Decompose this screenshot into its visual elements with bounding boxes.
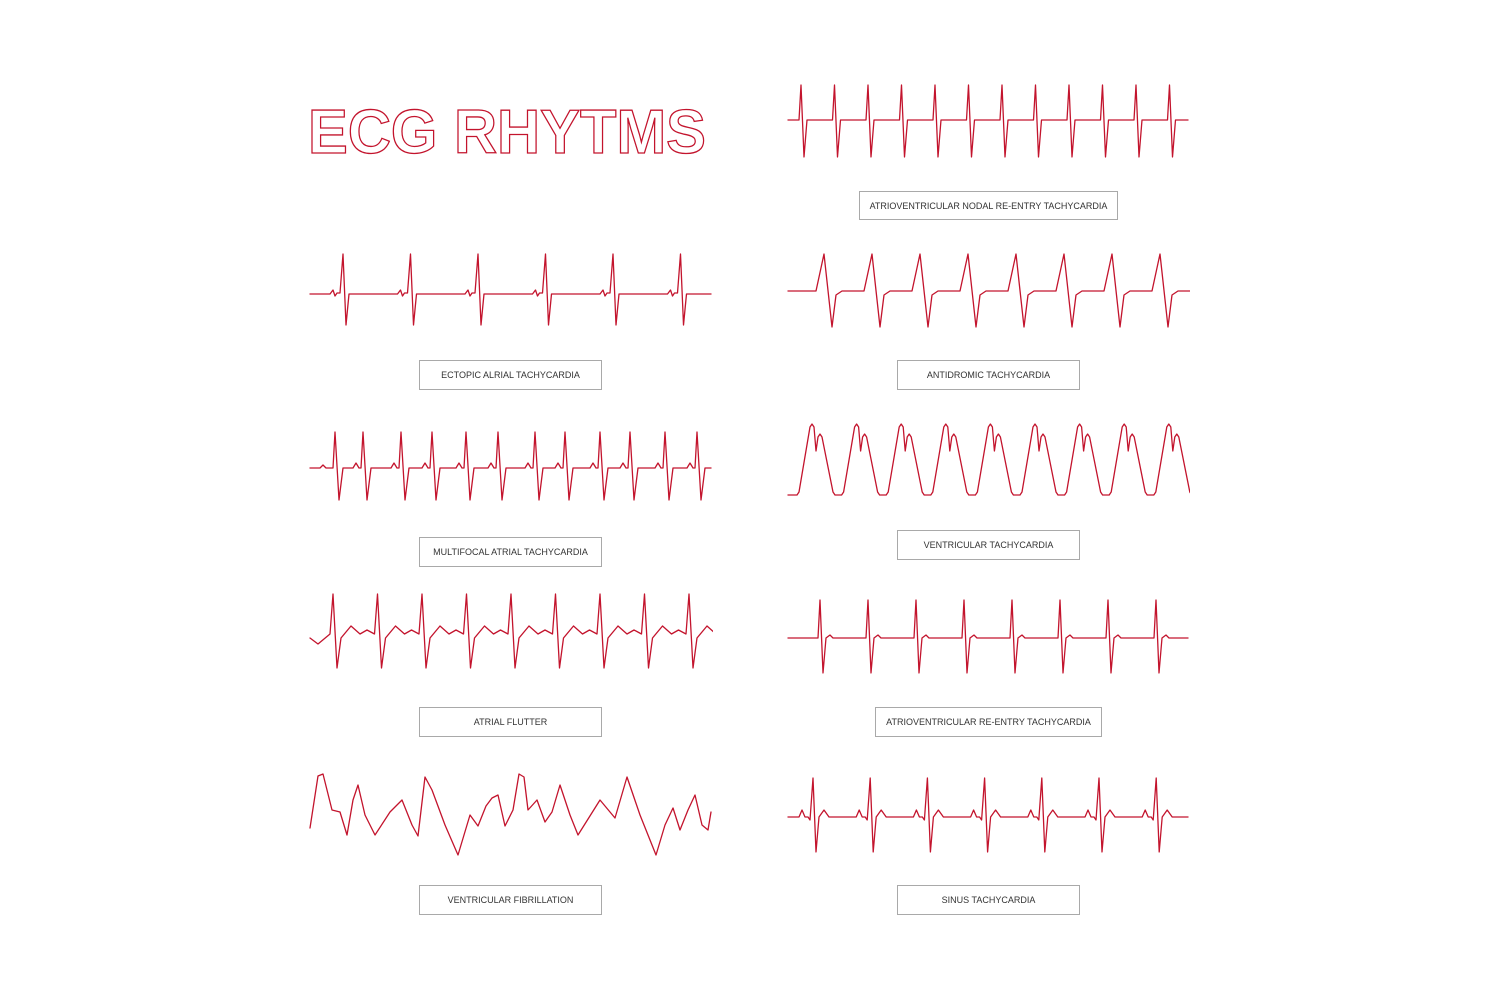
label: sinus tachycardia: SINUS TACHYCARDIA bbox=[942, 895, 1035, 905]
ecg: antidromic tachycardia bbox=[787, 253, 1190, 328]
label: atrioventricular nodal re-entry tachycardia: ATRIOVENTRICULAR NODAL RE-ENTRY TACHYCARDIA bbox=[870, 200, 1107, 210]
ecg: atrioventricular re-entry tachycardia bbox=[787, 599, 1189, 674]
label: ventricular fibrillation bbox=[419, 885, 602, 915]
label: antidromic tachycardia: ANTIDROMIC TACHYCARDIA bbox=[927, 370, 1050, 380]
label: atrioventricular re-entry tachycardia: ATRIOVENTRICULAR RE-ENTRY TACHYCARDIA bbox=[886, 717, 1091, 727]
label: ectopic alrial tachycardia bbox=[419, 360, 602, 390]
label: ventricular fibrillation: VENTRICULAR FIBRILLATION bbox=[448, 895, 573, 905]
label: antidromic tachycardia bbox=[897, 360, 1080, 390]
label: sinus tachycardia bbox=[897, 885, 1080, 915]
ecg: multifocal atrial tachycardia bbox=[309, 431, 712, 501]
label: ventricular tachycardia: VENTRICULAR TACHYCARDIA bbox=[924, 540, 1053, 550]
label: atrioventricular nodal re-entry tachycardia bbox=[859, 191, 1118, 220]
ecg: sinus tachycardia bbox=[787, 777, 1189, 853]
ecg: atrioventricular nodal re-entry tachycardia bbox=[787, 84, 1189, 158]
ecg: ventricular fibrillation bbox=[309, 773, 712, 856]
label: atrial flutter bbox=[419, 707, 602, 737]
ecg: ventricular tachycardia bbox=[787, 423, 1190, 496]
ecg: atrial flutter bbox=[309, 593, 713, 669]
label: multifocal atrial tachycardia: MULTIFOCAL ATRIAL TACHYCARDIA bbox=[433, 547, 588, 557]
title: ECG RHYTMS bbox=[308, 98, 706, 167]
label: atrial flutter: ATRIAL FLUTTER bbox=[474, 717, 547, 727]
label: multifocal atrial tachycardia bbox=[419, 537, 602, 567]
label: atrioventricular re-entry tachycardia bbox=[875, 707, 1102, 737]
label: ectopic alrial tachycardia: ECTOPIC ALRIAL TACHYCARDIA bbox=[441, 370, 580, 380]
ecg: ectopic atrial tachycardia bbox=[309, 253, 712, 326]
label: ventricular tachycardia bbox=[897, 530, 1080, 560]
